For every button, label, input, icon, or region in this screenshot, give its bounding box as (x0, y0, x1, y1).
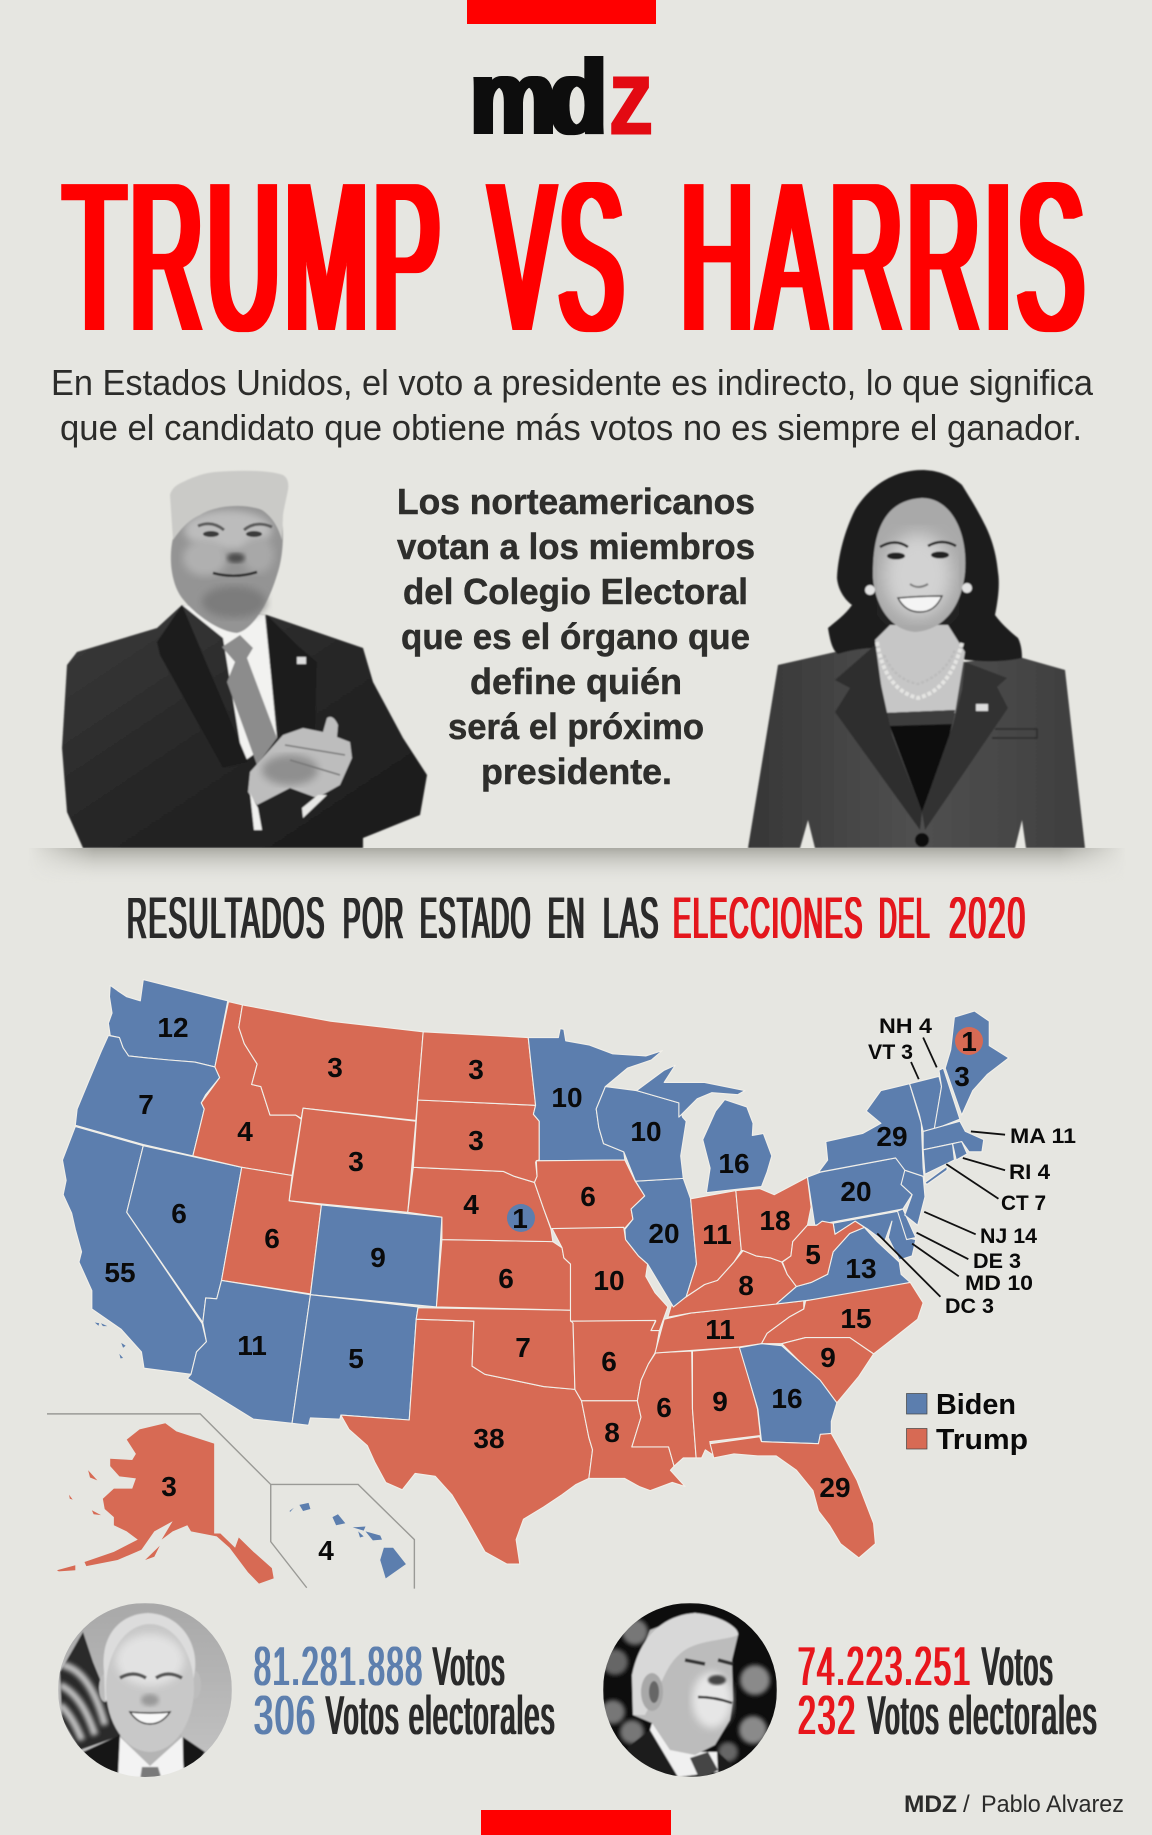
electoral vote numbers: 12 (157, 1012, 189, 1043)
vote totals: Trump (798, 1635, 1098, 1746)
callout leader lines (877, 1038, 1005, 1297)
bottom red bar (481, 1810, 671, 1835)
electoral vote numbers: 10 (551, 1082, 583, 1113)
small state callout labels: DE 3 (973, 1250, 1021, 1273)
shadow floor line (36, 848, 1118, 872)
electoral vote numbers: 6 (601, 1346, 617, 1377)
electoral vote numbers: 20 (840, 1176, 872, 1207)
vote totals: Trump: Votos (982, 1635, 1054, 1697)
central explanation text: del Colegio Electoral (403, 571, 748, 612)
western and central states (62, 980, 685, 1564)
legend (906, 1389, 1028, 1456)
electoral vote numbers: 20 (648, 1218, 680, 1249)
state: Hawaii (95, 1322, 406, 1578)
electoral vote numbers: 9 (820, 1342, 836, 1373)
credit: MDZ (904, 1791, 957, 1818)
vote totals: Trump: 74.223.251 (798, 1635, 972, 1697)
electoral vote numbers: 3 (327, 1052, 343, 1083)
central explanation text (397, 481, 755, 792)
intro paragraph (51, 362, 1094, 448)
vote totals: Biden: 306 (254, 1684, 317, 1746)
section heading (127, 886, 1027, 951)
title: TRUMP (64, 138, 445, 375)
electoral vote numbers: 29 (876, 1121, 908, 1152)
small state callout labels: NH 4 (879, 1015, 932, 1038)
electoral vote numbers: 10 (593, 1265, 625, 1296)
electoral vote numbers: 16 (718, 1148, 750, 1179)
central explanation text: votan a los miembros (397, 526, 755, 567)
electoral vote numbers: 9 (712, 1386, 728, 1417)
electoral vote numbers: 9 (370, 1242, 386, 1273)
electoral vote numbers: 1 (512, 1203, 528, 1234)
electoral vote numbers: 16 (771, 1383, 803, 1414)
electoral map of the United States (47, 980, 1009, 1589)
top red bar (467, 0, 656, 24)
electoral vote numbers: 11 (702, 1219, 732, 1250)
section heading: LAS (603, 886, 660, 951)
intro paragraph: que el candidato que obtiene más votos no es siempre el ganador. (60, 407, 1082, 448)
title: VS (490, 138, 628, 375)
central explanation text: define quién (470, 661, 682, 702)
electoral vote numbers: 3 (161, 1471, 177, 1502)
small state callout labels: MD 10 (965, 1272, 1033, 1295)
central explanation text: que es el órgano que (401, 616, 750, 657)
electoral vote numbers: 55 (104, 1257, 136, 1288)
photo: Harris (748, 470, 1085, 848)
electoral vote numbers: 6 (580, 1181, 596, 1212)
section heading: ELECCIONES (673, 886, 864, 951)
intro paragraph: En Estados Unidos, el voto a presidente es indirecto, lo que significa (51, 362, 1094, 403)
electoral vote numbers: 18 (759, 1205, 791, 1236)
electoral vote numbers: 6 (171, 1198, 187, 1229)
electoral vote numbers: 3 (468, 1125, 484, 1156)
small state callout labels: RI 4 (1009, 1161, 1050, 1184)
electoral vote numbers (104, 1012, 977, 1566)
district circle: Maine (955, 1027, 983, 1055)
small state callout labels (868, 1015, 1076, 1318)
electoral vote numbers: 8 (604, 1417, 620, 1448)
legend: Biden (936, 1389, 1016, 1421)
electoral vote numbers: 15 (840, 1303, 872, 1334)
electoral vote numbers: 13 (845, 1253, 877, 1284)
logo: mdz: m (470, 36, 556, 157)
central explanation text: será el próximo (448, 706, 704, 747)
small state callout labels: DC 3 (945, 1295, 994, 1318)
text: electorales (409, 1684, 556, 1746)
section heading: RESULTADOS (127, 886, 326, 951)
electoral vote numbers: 4 (463, 1189, 479, 1220)
electoral vote numbers: 7 (515, 1332, 531, 1363)
small state callout labels: MA 11 (1010, 1125, 1076, 1148)
electoral vote numbers: 7 (138, 1089, 154, 1120)
section heading: 2020 (949, 886, 1027, 951)
central explanation text: presidente. (481, 751, 672, 792)
vote totals: Biden: Votos (433, 1635, 506, 1697)
vote totals: Trump: 232 (798, 1684, 857, 1746)
central explanation text: Los norteamericanos (397, 481, 755, 522)
electoral vote numbers: 4 (237, 1116, 253, 1147)
electoral vote numbers: 29 (819, 1472, 851, 1503)
electoral vote numbers: 11 (705, 1314, 735, 1345)
photo: Trump clapping (62, 471, 427, 848)
section heading: POR (343, 886, 405, 951)
electoral vote numbers: 4 (318, 1535, 334, 1566)
section heading: DEL (879, 886, 931, 951)
state: Alaska (57, 1423, 274, 1584)
electoral vote numbers: 1 (961, 1026, 977, 1057)
electoral vote numbers: 3 (954, 1061, 970, 1092)
electoral vote numbers: 3 (468, 1054, 484, 1085)
electoral vote numbers: 38 (473, 1423, 505, 1454)
legend: Trump (936, 1424, 1028, 1456)
small state callout labels: VT 3 (868, 1041, 913, 1064)
credit: Pablo Alvarez (981, 1791, 1124, 1818)
vote totals: Trump: Votos (868, 1684, 940, 1746)
credit: / (963, 1791, 970, 1818)
portrait: Biden (58, 1603, 232, 1780)
small state callout labels: CT 7 (1001, 1192, 1046, 1215)
vote totals: Biden: 81.281.888 (254, 1635, 424, 1697)
inset frame lines (47, 1414, 414, 1589)
electoral vote numbers: 5 (805, 1239, 821, 1270)
electoral vote numbers: 6 (498, 1263, 514, 1294)
electoral vote numbers: 6 (264, 1223, 280, 1254)
section heading: ESTADO (420, 886, 532, 951)
vote totals: Biden (254, 1635, 556, 1746)
portrait: Trump (601, 1603, 777, 1780)
electoral vote numbers: 3 (348, 1146, 364, 1177)
logo: mdz (470, 36, 654, 157)
section heading: EN (548, 886, 586, 951)
electoral vote numbers: 11 (237, 1330, 267, 1361)
electoral vote numbers: 8 (738, 1270, 754, 1301)
eastern states (596, 1011, 1009, 1558)
credit (904, 1791, 1124, 1818)
electoral vote numbers: 6 (656, 1392, 672, 1423)
electoral vote numbers: 10 (630, 1116, 662, 1147)
logo: mdz: z (608, 36, 654, 157)
logo: mdz: d (549, 36, 607, 157)
small state callout labels: NJ 14 (980, 1225, 1037, 1248)
district circle: Nebraska (507, 1204, 535, 1232)
vote totals: Biden: Votos (326, 1684, 400, 1746)
electoral vote numbers: 5 (348, 1343, 364, 1374)
